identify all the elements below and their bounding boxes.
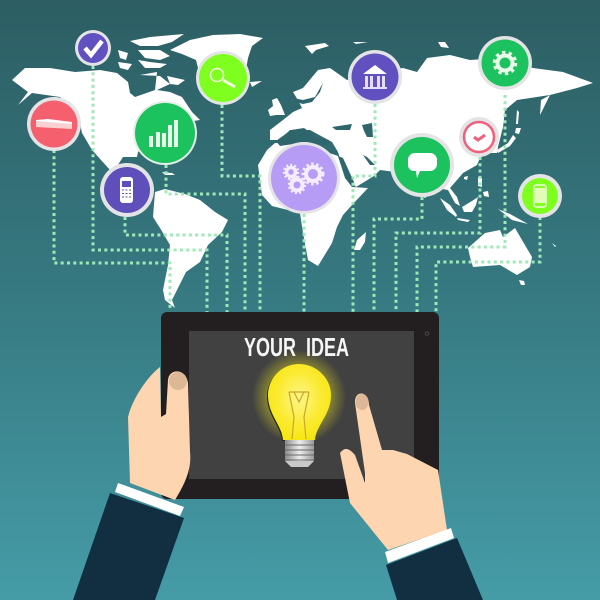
- icon: purple bank badge: [348, 50, 402, 104]
- right cuff: [385, 528, 454, 563]
- left sleeve: [73, 483, 184, 600]
- icon: purple mobile phone badge: [100, 163, 154, 217]
- world map: [12, 34, 593, 308]
- left cuff: [115, 483, 184, 516]
- icon: lime magnifier badge: [196, 51, 250, 105]
- right sleeve: [385, 528, 483, 600]
- icon: green chat bubble badge: [390, 133, 454, 197]
- icon: glowing light bulb: [252, 350, 346, 467]
- icon: purple check badge: [75, 30, 111, 66]
- left thumbnail: [169, 372, 187, 390]
- icon: green cog badge: [478, 36, 532, 90]
- tablet screen: [189, 331, 414, 479]
- tablet camera: [425, 332, 429, 335]
- title: YOUR IDEA: [244, 332, 349, 362]
- icon: pink box badge: [27, 97, 81, 151]
- icon: green bar chart badge: [133, 101, 197, 165]
- icon: lime smartphone badge: [518, 174, 562, 218]
- right hand: [340, 393, 447, 550]
- inland seas: [276, 83, 375, 187]
- left hand: [128, 367, 190, 500]
- index fingernail: [356, 394, 368, 410]
- icon: white check badge: [459, 117, 499, 157]
- panel: tablet: [161, 312, 439, 499]
- dotted connector lines: [54, 66, 540, 312]
- icon: lilac gears badge: [268, 142, 340, 214]
